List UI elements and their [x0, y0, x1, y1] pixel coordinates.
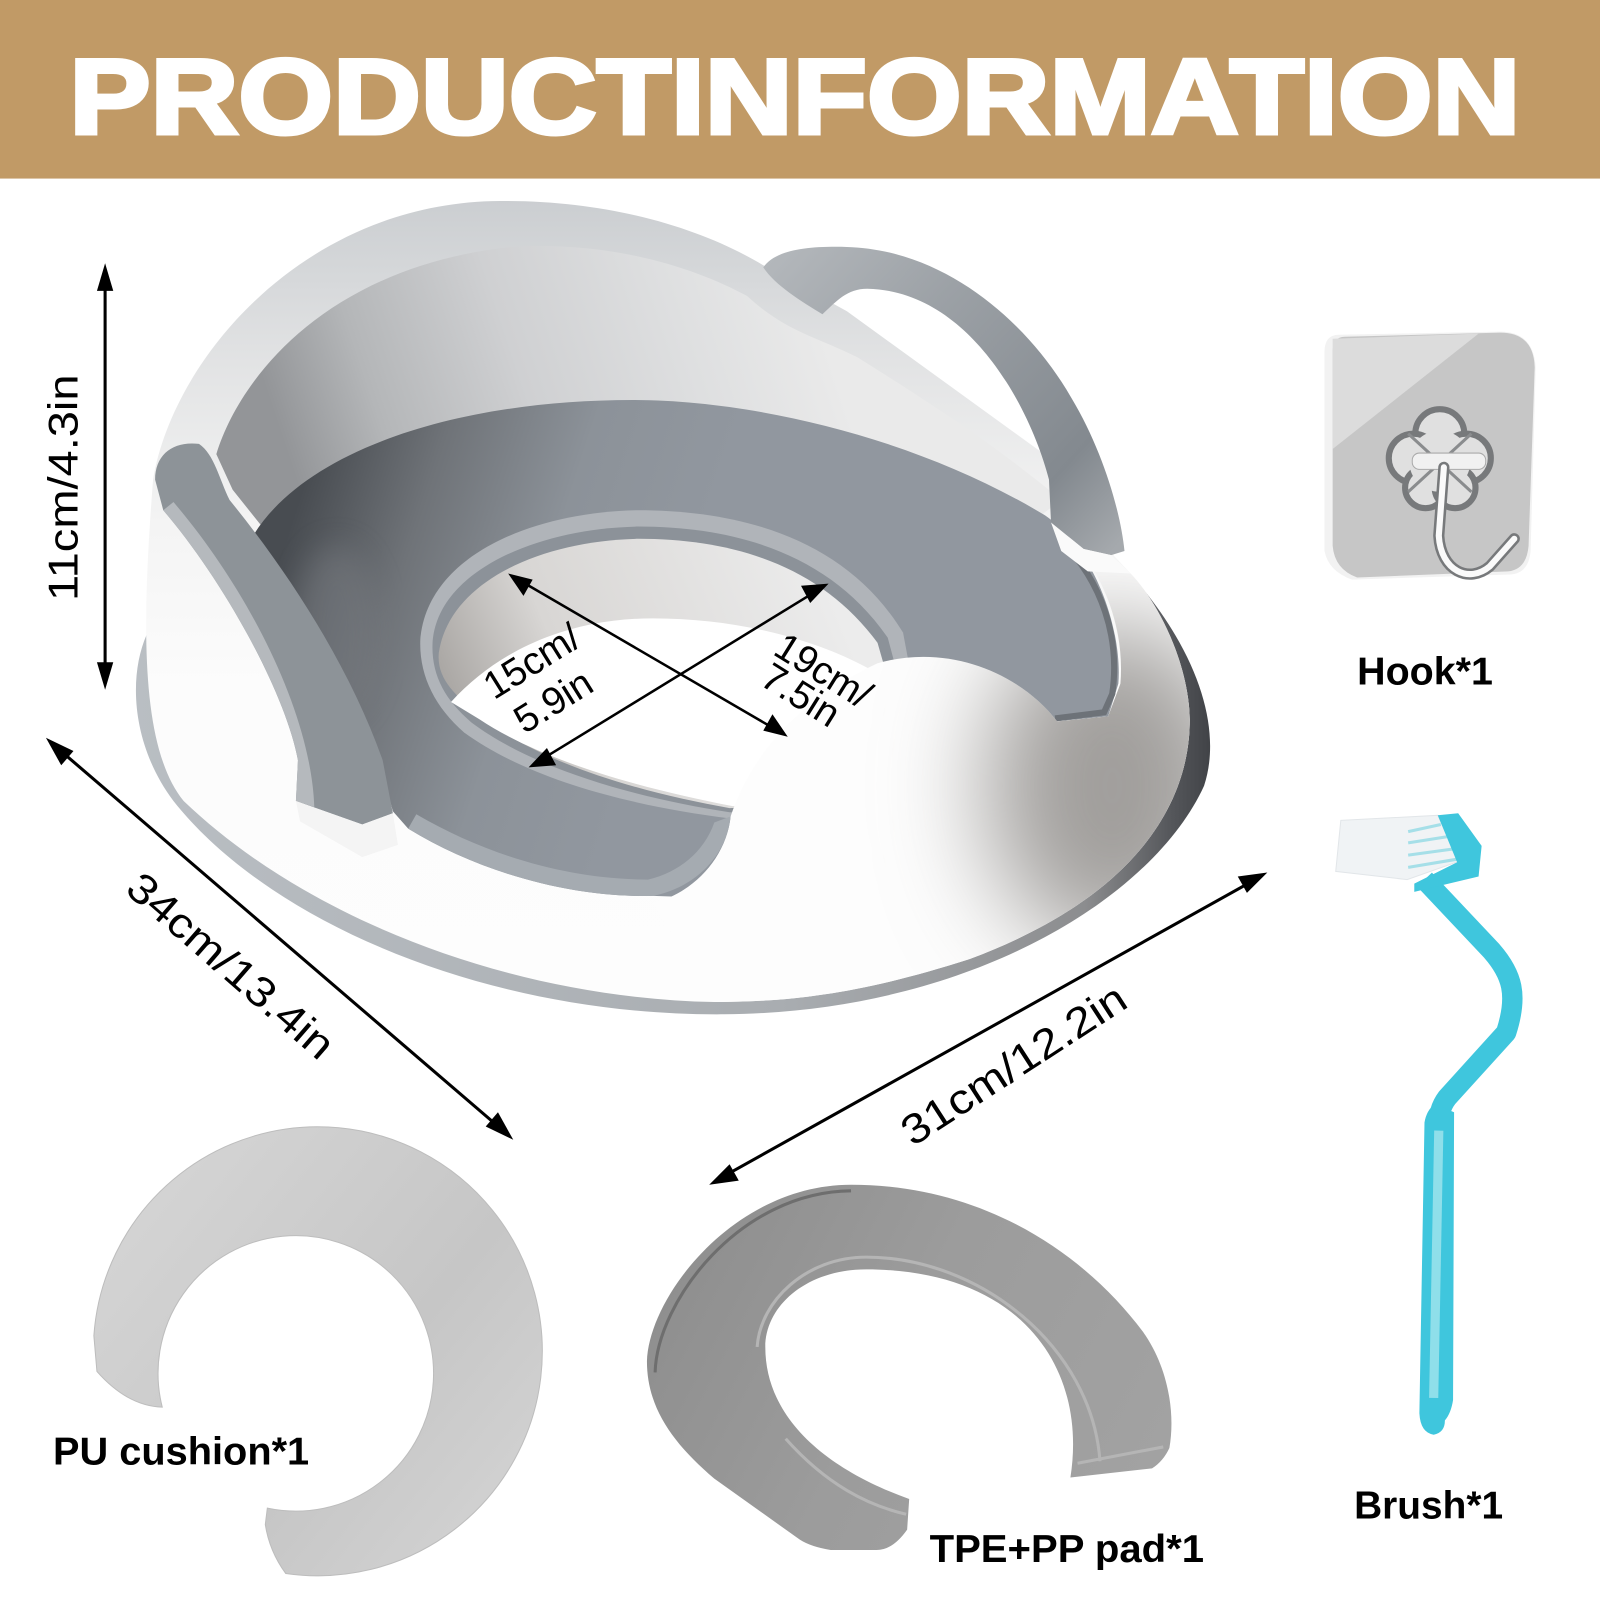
- PU cushion: [94, 1127, 542, 1576]
- title banner: [0, 0, 1600, 179]
- label: PU cushion: PU cushion*1: [53, 1430, 309, 1473]
- brush slot highlight: [1434, 1131, 1439, 1398]
- plate highlight: [1333, 334, 1479, 449]
- hook crossbar: [1412, 453, 1486, 469]
- label: brush: Brush*1: [1354, 1484, 1503, 1527]
- brush bristles: [1336, 815, 1459, 880]
- label: hook: Hook*1: [1357, 651, 1493, 694]
- dimension: seat height: 11cm/4.3in: [40, 374, 87, 601]
- brush handle: [1424, 880, 1512, 1127]
- dimension: hole length: 7.5in: [753, 655, 848, 736]
- brush head: [1414, 813, 1482, 892]
- front splash guard dome: [672, 582, 1190, 1002]
- dimension: hole width: 15cm/: [476, 616, 588, 708]
- right handle: [763, 247, 1131, 573]
- dimension: hole length: 19cm/: [767, 625, 879, 717]
- pad inner ridge: [757, 1257, 1163, 1514]
- flower divider lines: [1408, 434, 1471, 492]
- dimension: seat width: 31cm/12.2in: [892, 974, 1135, 1155]
- icon: wall hook: [1324, 332, 1536, 580]
- brush bristle tips: [1408, 824, 1457, 867]
- seat back wall: [216, 246, 1061, 531]
- pad front ridge: [408, 814, 731, 896]
- icon: cleaning brush: [1336, 813, 1512, 1435]
- dimension: seat length: [46, 738, 513, 1140]
- hook wire: [1439, 467, 1514, 574]
- dimension: seat width: [709, 872, 1267, 1185]
- dimension: hole width: [476, 573, 788, 742]
- label: TPE+PP pad: TPE+PP pad*1: [930, 1528, 1204, 1571]
- dimension: hole width: 5.9in: [507, 661, 601, 742]
- title: PRODUCTINFORMATION: [69, 37, 1520, 157]
- seat base rim: [136, 577, 1210, 1014]
- seat hole: [420, 510, 918, 818]
- TPE+PP pad: [647, 1185, 1171, 1550]
- potty seat product: [136, 201, 1240, 1020]
- dimension: seat height: [40, 263, 113, 690]
- dimension: hole length: [529, 584, 879, 767]
- pad dark shading: [298, 551, 360, 672]
- pad outer seam: [655, 1191, 851, 1372]
- seat body: [146, 201, 1190, 1002]
- seat pad: [253, 400, 1119, 898]
- dimension: seat length: 34cm/13.4in: [118, 863, 344, 1068]
- left handle: [155, 443, 398, 857]
- hook flower: [1389, 409, 1491, 508]
- right pad ridge: [1055, 541, 1114, 718]
- dome shading: [985, 622, 1240, 949]
